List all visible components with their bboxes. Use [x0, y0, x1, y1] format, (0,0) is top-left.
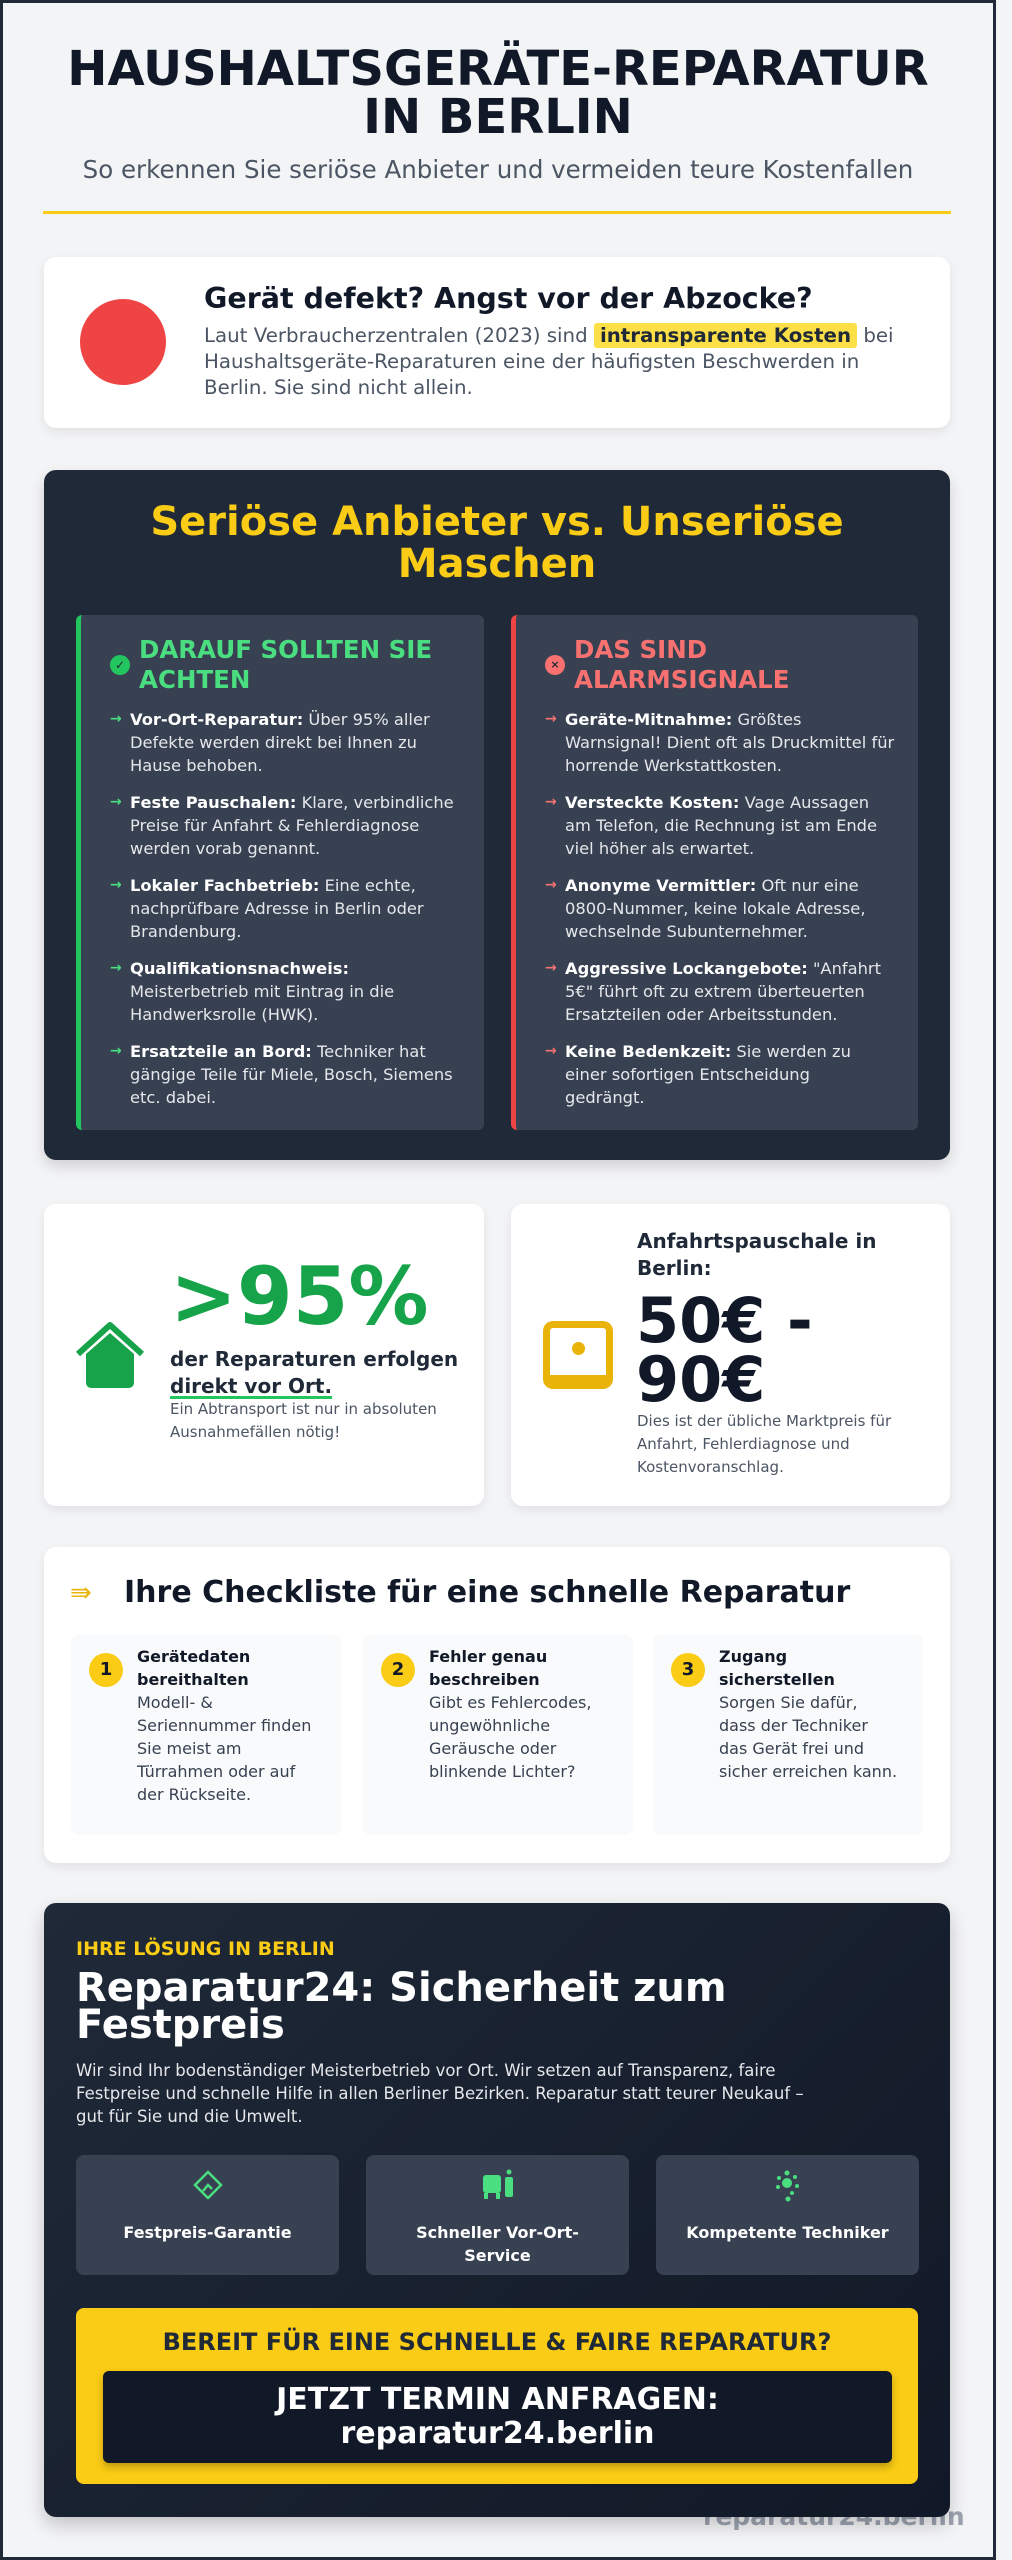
- step 1: Gerätedaten bereithalten: [137, 1647, 250, 1689]
- title: HAUSHALTSGERÄTE-REPARATUR: [67, 41, 929, 97]
- column: good signs: →: [110, 877, 122, 893]
- panel: checklist: [44, 1547, 950, 1863]
- CTA button: reparatur24.berlin: [340, 2416, 655, 2451]
- step 2: Fehler genau beschreiben: [429, 1647, 547, 1689]
- stat label: [170, 1347, 458, 1399]
- step 3: [653, 1634, 923, 1835]
- column: good signs: Feste Pauschalen: Klare, verbindliche Preise für Anfahrt & Fehlerdiagnose werden vorab genannt.: [130, 793, 454, 858]
- step 1: 1: [100, 1659, 112, 1680]
- big number: >95%: [170, 1250, 429, 1343]
- solution heading: Reparatur24: Sicherheit zum: [76, 1965, 727, 2011]
- step 2: Gibt es Fehlercodes, ungewöhnliche Geräusche oder blinkende Lichter?: [429, 1693, 591, 1781]
- step 2: [363, 1634, 633, 1835]
- CTA box: [76, 2308, 918, 2484]
- column: alarm signs: →: [545, 1043, 557, 1059]
- stat card: 95%: [44, 1204, 484, 1506]
- checklist heading: Ihre Checkliste für eine schnelle Reparatur: [124, 1575, 850, 1610]
- column: alarm signs: Anonyme Vermittler: Oft nur eine 0800-Nummer, keine lokale Adresse, wechselnde Subunternehmer.: [565, 876, 866, 941]
- intro heading: Gerät defekt? Angst vor der Abzocke?: [204, 282, 813, 315]
- feature: techniker: [656, 2155, 919, 2275]
- feature: techniker: Kompetente Techniker: [686, 2223, 889, 2242]
- solution heading: Festpreis: [76, 2002, 285, 2048]
- feature: service: Service: [464, 2246, 531, 2265]
- title: [67, 40, 929, 145]
- column: good signs: Ersatzteile an Bord: Techniker hat gängige Teile für Miele, Bosch, Siemens etc. dabei.: [130, 1042, 453, 1107]
- column heading: ACHTEN: [139, 665, 250, 694]
- price: 90€: [636, 1343, 765, 1416]
- icon: x: [545, 655, 565, 675]
- column heading: [139, 635, 432, 694]
- column heading: ALARMSIGNALE: [574, 665, 789, 694]
- step 3: Sorgen Sie dafür, dass der Techniker das Gerät frei und sicher erreichen kann.: [719, 1693, 897, 1781]
- subtitle: So erkennen Sie seriöse Anbieter und vermeiden teure Kostenfallen: [83, 155, 913, 184]
- title: IN BERLIN: [363, 89, 633, 145]
- column: alarm signs: Versteckte Kosten: Vage Aussagen am Telefon, die Rechnung ist am Ende viel höher als erwartet.: [565, 793, 877, 858]
- feature: service: Schneller Vor-Ort-: [416, 2223, 579, 2242]
- panel: intro card: [44, 257, 950, 428]
- feature: Festpreis: [76, 2155, 339, 2275]
- CTA heading: BEREIT FÜR EINE SCHNELLE & FAIRE REPARATUR?: [163, 2328, 831, 2356]
- intro text: Laut Verbraucherzentralen (2023) sind intransparente Kosten bei Haushaltsgeräte-Reparaturen eine der häufigsten Beschwerden in Berlin. Sie sind nicht allein.: [204, 324, 894, 399]
- stat note: Ein Abtransport ist nur in absoluten Ausnahmefällen nötig!: [170, 1400, 437, 1441]
- icon: house: [76, 1322, 144, 1388]
- comparison heading: Seriöse Anbieter vs. Unseriöse: [150, 499, 844, 545]
- column heading: [574, 635, 789, 694]
- step 3: Zugang: [719, 1647, 787, 1666]
- step 2: 2: [392, 1659, 404, 1680]
- column: alarm signs: einer sofortigen Entscheidung: [565, 1065, 810, 1084]
- step 3: sicherstellen: [719, 1670, 835, 1689]
- price note: Dies ist der übliche Marktpreis für Anfahrt, Fehlerdiagnose und Kostenvoranschlag.: [637, 1412, 891, 1476]
- icon: arrow: ⇛: [70, 1578, 92, 1608]
- stat label: direkt vor Ort.: [170, 1374, 332, 1398]
- column: good signs: Qualifikationsnachweis:: [130, 959, 349, 978]
- icon: yellow device: [543, 1321, 613, 1389]
- column: good signs: Meisterbetrieb mit Eintrag in die Handwerksrolle (HWK).: [130, 982, 394, 1024]
- column: good signs: Lokaler Fachbetrieb: Eine echte, nachprüfbare Adresse in Berlin oder Brandenburg.: [130, 876, 424, 941]
- feature: Festpreis: Festpreis-Garantie: [123, 2223, 292, 2242]
- column: good signs: →: [110, 1043, 122, 1059]
- column heading: DAS SIND: [574, 635, 707, 664]
- stat card: price: [511, 1204, 950, 1506]
- column heading: DARAUF SOLLTEN SIE: [139, 635, 432, 664]
- step 1: [71, 1634, 341, 1835]
- column: alarm signs: →: [545, 960, 557, 976]
- column: alarm signs: [511, 615, 918, 1130]
- solution text: Wir sind Ihr bodenständiger Meisterbetrieb vor Ort. Wir setzen auf Transparenz, faire Festpreise und schnelle Hilfe in allen Berliner Bezirken. Reparatur statt teurer Neukauf – gut für Sie und die Umwelt.: [76, 2061, 804, 2126]
- column: good signs: →: [110, 711, 122, 727]
- panel: comparison: [44, 470, 950, 1160]
- icon: x: ×: [550, 658, 560, 671]
- step 1: Modell- & Seriennummer finden Sie meist am Türrahmen oder auf der Rückseite.: [137, 1693, 311, 1804]
- column: alarm signs: →: [545, 877, 557, 893]
- price: 50€ -: [636, 1284, 813, 1357]
- panel: solution: [44, 1903, 950, 2517]
- column: alarm signs: →: [545, 794, 557, 810]
- column: good signs: Vor-Ort-Reparatur: Über 95% aller Defekte werden direkt bei Ihnen zu Hause behoben.: [130, 710, 430, 775]
- price: [636, 1284, 813, 1416]
- icon: check: ✓: [115, 658, 125, 672]
- column: alarm signs: →: [545, 711, 557, 727]
- CTA button: [103, 2371, 892, 2463]
- column: alarm signs: Geräte-Mitnahme: Größtes Warnsignal! Dient oft als Druckmittel für horrende Werkstattkosten.: [565, 710, 894, 775]
- column: good signs: →: [110, 960, 122, 976]
- column: alarm signs: Keine Bedenkzeit: Sie werden zu: [565, 1042, 851, 1061]
- step 3: 3: [682, 1659, 694, 1680]
- price label: Anfahrtspauschale in Berlin:: [637, 1229, 877, 1280]
- watermark: reparatur24.berlin: [703, 2502, 965, 2531]
- column: alarm signs: gedrängt.: [565, 1088, 645, 1107]
- feature: service: [366, 2155, 629, 2275]
- comparison heading: Maschen: [398, 541, 596, 587]
- eyebrow: IHRE LÖSUNG IN BERLIN: [76, 1938, 335, 1960]
- stat label: der Reparaturen erfolgen: [170, 1347, 458, 1371]
- column: good signs: →: [110, 794, 122, 810]
- column: alarm signs: Aggressive Lockangebote: "Anfahrt 5€" führt oft zu extrem überteuerten Ersatzteilen oder Arbeitsstunden.: [565, 959, 881, 1024]
- CTA button: JETZT TERMIN ANFRAGEN:: [276, 2382, 719, 2417]
- comparison heading: [150, 499, 844, 587]
- icon: check: [110, 655, 130, 675]
- solution heading: [76, 1965, 727, 2048]
- column: good signs: [76, 615, 484, 1130]
- icon: red alarm circle: [80, 299, 166, 385]
